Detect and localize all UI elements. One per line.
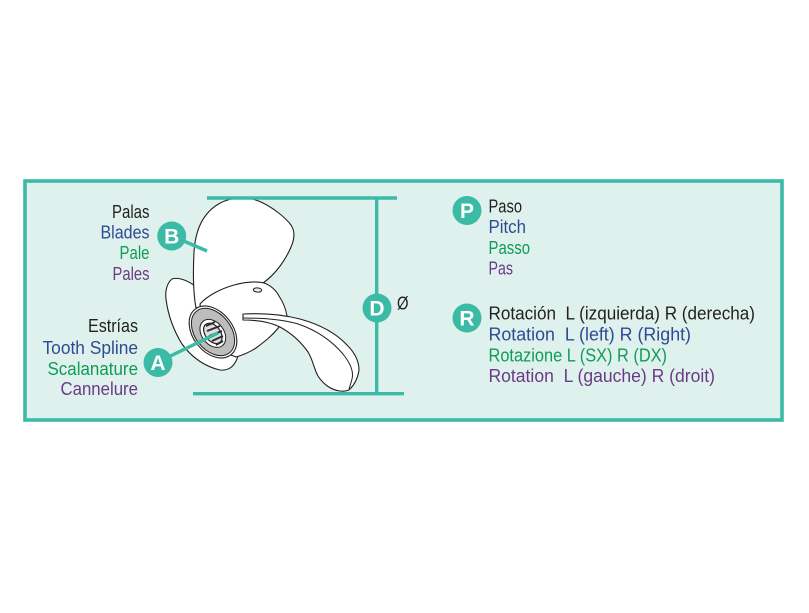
right blade inner edge: [243, 318, 353, 389]
labels: rotation: Rotación L (izquierda) R (derecha): [488, 302, 755, 324]
hub face: [179, 297, 247, 367]
labels: pitch: [488, 196, 530, 278]
callout: D: D: [369, 298, 385, 320]
panel: propeller specifications: [25, 181, 782, 420]
callout: D: [362, 294, 392, 322]
labels: pitch: Passo: [488, 237, 530, 258]
labels: tooth spline: [42, 315, 138, 399]
callout: A: A: [150, 352, 166, 375]
top blade: [193, 198, 294, 308]
spline teeth: [206, 322, 223, 345]
labels: blades: Palas: [112, 201, 150, 222]
callout: R: R: [459, 308, 475, 330]
labels: rotation: Rotazione L (SX) R (DX): [488, 344, 667, 366]
labels: pitch: Pitch: [488, 216, 526, 237]
callout: B: [157, 222, 207, 251]
propeller illustration: [166, 198, 359, 391]
rear blade: [166, 278, 238, 370]
labels: blades: Pale: [120, 242, 150, 263]
labels: pitch: Paso: [488, 196, 522, 216]
labels: blades: [100, 201, 150, 284]
labels: pitch: Pas: [488, 258, 513, 278]
callout: R: [452, 304, 482, 332]
labels: rotation: Rotation L (left) R (Right): [488, 324, 691, 344]
right blade: [243, 314, 359, 391]
hub: [200, 282, 287, 357]
label: diameter symbol: Ø: [397, 292, 408, 314]
callout: B: B: [164, 226, 179, 248]
labels: rotation: Rotation L (gauche) R (droit): [488, 365, 715, 386]
labels: rotation: [488, 302, 755, 386]
callout: P: P: [460, 200, 474, 223]
labels: tooth spline: Cannelure: [60, 378, 138, 399]
labels: tooth spline: Estrías: [88, 315, 138, 336]
callout: P: [452, 196, 482, 225]
labels: tooth spline: Scalanature: [48, 358, 138, 379]
hub hole: [253, 288, 262, 292]
labels: blades: Blades: [100, 222, 150, 242]
labels: tooth spline: Tooth Spline: [42, 337, 138, 358]
callout: A: [144, 333, 218, 377]
labels: blades: Pales: [112, 263, 150, 284]
dimension lines: diameter: [193, 198, 404, 394]
